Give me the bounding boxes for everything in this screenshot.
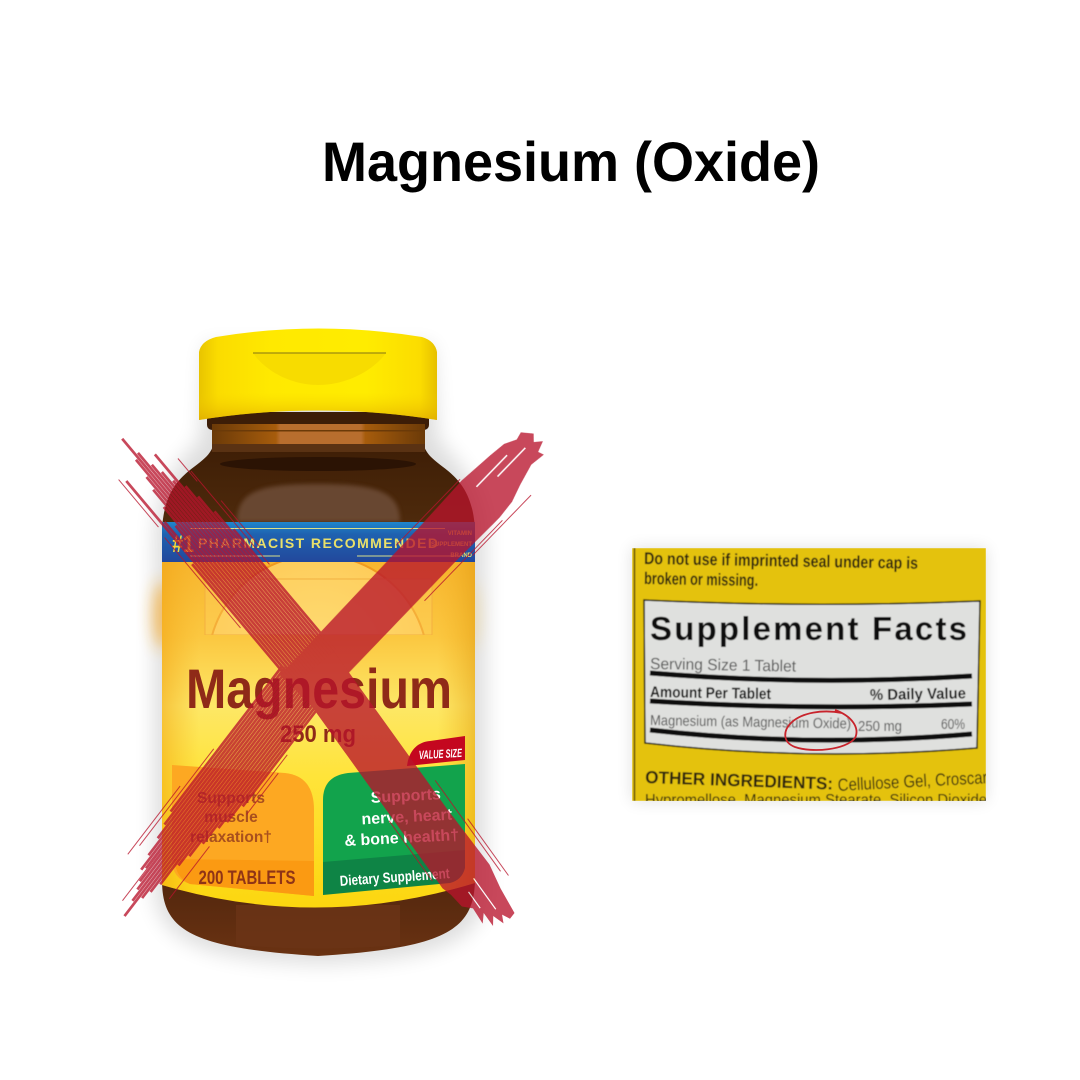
amount row: Amount Per Tablet <box>650 684 771 703</box>
falling stroke, solid lower arm <box>283 635 529 943</box>
serving size: Serving Size 1 Tablet <box>650 656 797 676</box>
orange panel text: relaxation† <box>190 829 272 846</box>
amount row: % Daily Value <box>870 685 966 704</box>
orange panel text: Supports <box>197 790 265 807</box>
magnesium row: 250 mg <box>858 719 902 735</box>
banner text: PHARMACIST RECOMMENDED <box>198 535 438 551</box>
other ingredients text: Cellulose Gel, Croscar <box>837 767 988 795</box>
cap thumb recess <box>253 353 386 385</box>
falling stroke, scratchy upper arm <box>98 416 342 688</box>
warning text: Do not use if imprinted seal under cap is <box>644 549 918 573</box>
bottle shadow <box>154 345 486 964</box>
product bottle <box>154 328 486 964</box>
green benefit panel <box>323 764 465 895</box>
green panel text: nerve, heart <box>361 807 453 828</box>
magnesium row <box>650 713 965 735</box>
orange panel text: 200 TABLETS <box>198 868 296 889</box>
green panel text: Dietary Supplement <box>339 866 450 890</box>
green panel text: & bone health† <box>344 827 459 850</box>
warning text: broken or missing. <box>644 569 758 590</box>
rising stroke, solid upper arm <box>275 418 564 713</box>
orange panel text: muscle <box>204 809 258 826</box>
facts panel <box>644 600 980 754</box>
title: Magnesium (Oxide) <box>322 130 820 193</box>
banner text: #1 <box>172 531 194 558</box>
yellow cap <box>199 328 437 420</box>
green panel text: Supports <box>370 786 441 807</box>
green panel text <box>339 786 459 890</box>
banner text: BRAND <box>450 553 473 559</box>
other ingredients text <box>645 770 986 801</box>
yellow label <box>162 560 475 908</box>
orange label glow <box>154 581 479 649</box>
photo shadow <box>632 548 986 801</box>
banner text <box>172 528 473 559</box>
glass body <box>162 446 475 956</box>
glass shoulder shading <box>220 457 416 522</box>
neck <box>207 412 429 452</box>
red brush X <box>97 416 564 943</box>
magnesium row: 60% <box>941 717 965 733</box>
magnesium row: Magnesium (as Magnesium Oxide) <box>650 713 851 733</box>
orange panel text <box>190 790 296 889</box>
value size badge <box>407 736 465 766</box>
bottle base shading <box>236 905 400 948</box>
rising stroke, scratchy lower arm <box>97 661 332 937</box>
red circle highlight <box>785 710 856 750</box>
banner text: VITAMIN <box>448 531 472 537</box>
rule bars <box>650 673 972 707</box>
orange benefit panel <box>172 765 314 896</box>
label side shading <box>162 560 475 908</box>
banner text: SUPPLEMENT <box>431 542 472 548</box>
dosage: 250 mg <box>280 721 356 748</box>
amount row <box>650 686 966 704</box>
supplement facts label photo <box>632 548 988 809</box>
value size badge: VALUE SIZE <box>419 746 463 762</box>
blue banner <box>162 522 475 562</box>
facts heading: Supplement Facts <box>650 610 967 647</box>
warning text <box>644 549 918 590</box>
sun graphic <box>204 562 432 635</box>
yellow packaging background <box>632 548 986 801</box>
other ingredients text: OTHER INGREDIENTS: <box>645 767 833 794</box>
product name: Magnesium <box>186 657 452 720</box>
other ingredients text: Hypromellose, Magnesium Stearate, Silicon Dioxide <box>645 792 987 809</box>
